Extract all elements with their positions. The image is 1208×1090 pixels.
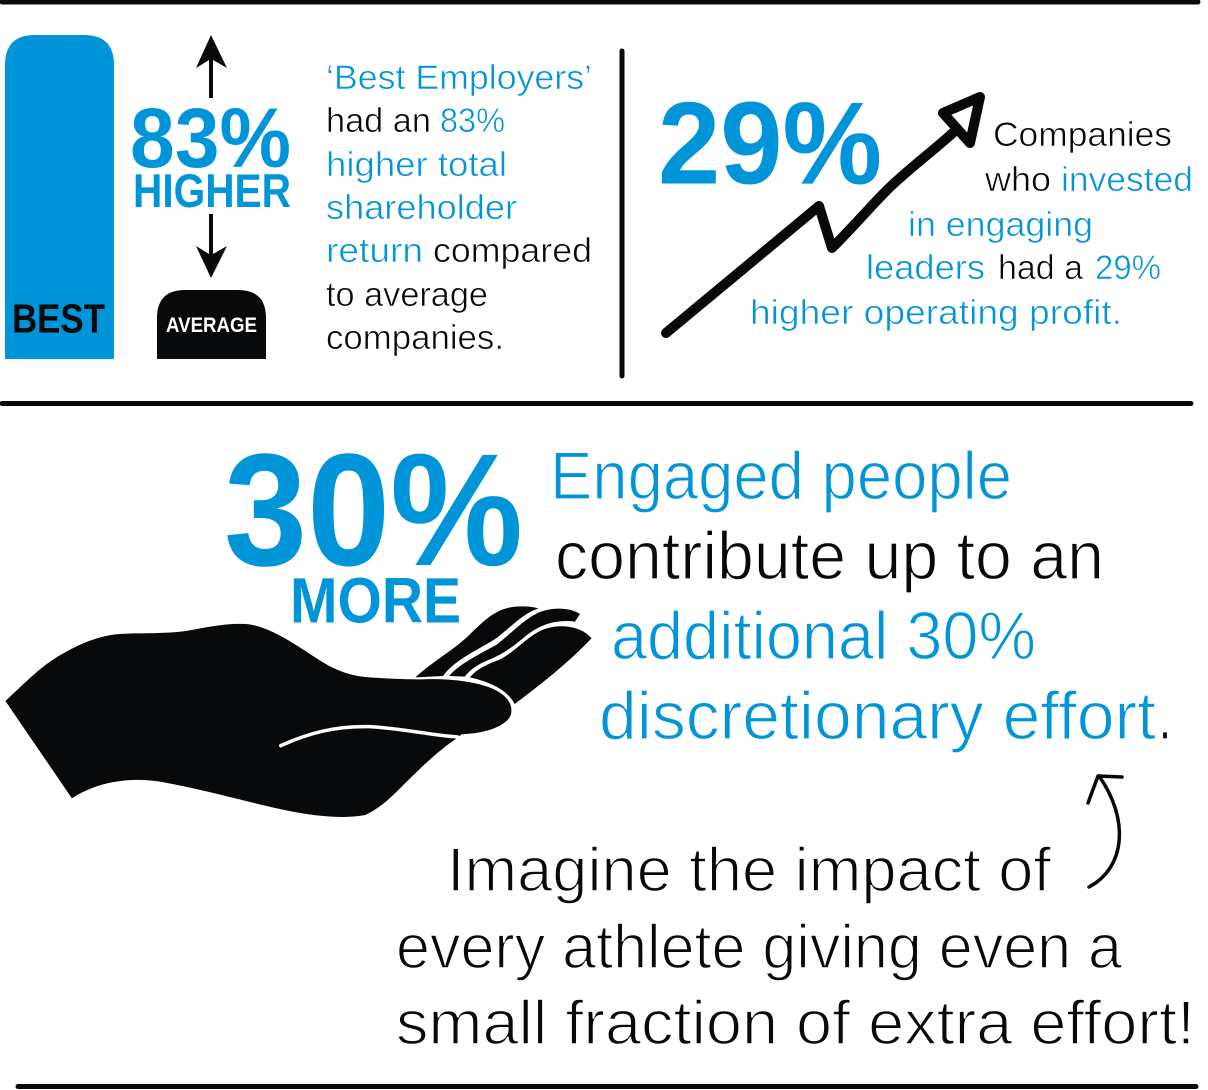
label: average: AVERAGE: [166, 314, 257, 337]
text block: companies: invested: [1061, 161, 1193, 199]
text block: companies: Companies: [993, 116, 1172, 154]
text block: companies: in engaging: [908, 206, 1093, 244]
text block: imagine the impact: small fraction of extra effort!: [396, 989, 1195, 1058]
text block: best employers: ‘Best Employers’: [326, 59, 592, 97]
text block: engaged people: [550, 438, 1172, 754]
arrow: up: [196, 35, 227, 98]
stat: 83%: 83%: [130, 91, 291, 185]
text block: best employers: 83%: [440, 102, 505, 140]
panel: 29% profit: [658, 78, 980, 333]
text block: companies: 29%: [1095, 249, 1161, 287]
text block: best employers: return: [326, 232, 423, 270]
top rule: [2, 0, 1198, 4]
text block: companies: [750, 116, 1193, 332]
stat label: more: MORE: [290, 564, 461, 636]
text block: best employers: higher total: [326, 146, 507, 184]
middle rule: [2, 401, 1191, 406]
stat: 30%: 30%: [224, 420, 523, 599]
text block: best employers: to average: [326, 276, 488, 314]
panel: 83% higher comparison: [5, 35, 291, 359]
arrow: down: [196, 214, 227, 278]
text block: companies: higher operating profit.: [750, 294, 1122, 332]
stat label: higher: HIGHER: [133, 164, 291, 217]
label: best: BEST: [12, 296, 105, 342]
text block: engaged people: discretionary effort: [599, 678, 1156, 754]
bar: best: [5, 35, 114, 359]
icon: rising arrow: [666, 97, 980, 333]
text block: best employers: [326, 59, 592, 357]
text block: best employers: companies.: [326, 319, 504, 357]
text block: best employers: had an: [326, 102, 431, 140]
stat: 29%: 29%: [658, 78, 882, 208]
text block: companies: had a: [998, 249, 1083, 287]
text block: best employers: shareholder: [326, 189, 517, 227]
text block: engaged people: Engaged people: [550, 438, 1012, 514]
text block: engaged people: additional 30%: [611, 598, 1036, 674]
bottom rule: [18, 1084, 1196, 1089]
text block: engaged people: contribute up to an: [555, 518, 1104, 594]
text block: companies: leaders: [866, 249, 985, 287]
icon: curved arrow: [1088, 776, 1122, 887]
text block: best employers: compared: [433, 232, 592, 270]
text block: imagine the impact: Imagine the impact of: [447, 836, 1052, 905]
vertical divider: [620, 51, 624, 376]
text block: engaged people: .: [1158, 678, 1172, 754]
icon: open hand: [5, 606, 592, 817]
text block: imagine the impact: [396, 836, 1195, 1058]
bar: average: [157, 290, 266, 359]
text block: imagine the impact: every athlete giving even a: [396, 913, 1122, 982]
text block: companies: who: [984, 161, 1051, 199]
